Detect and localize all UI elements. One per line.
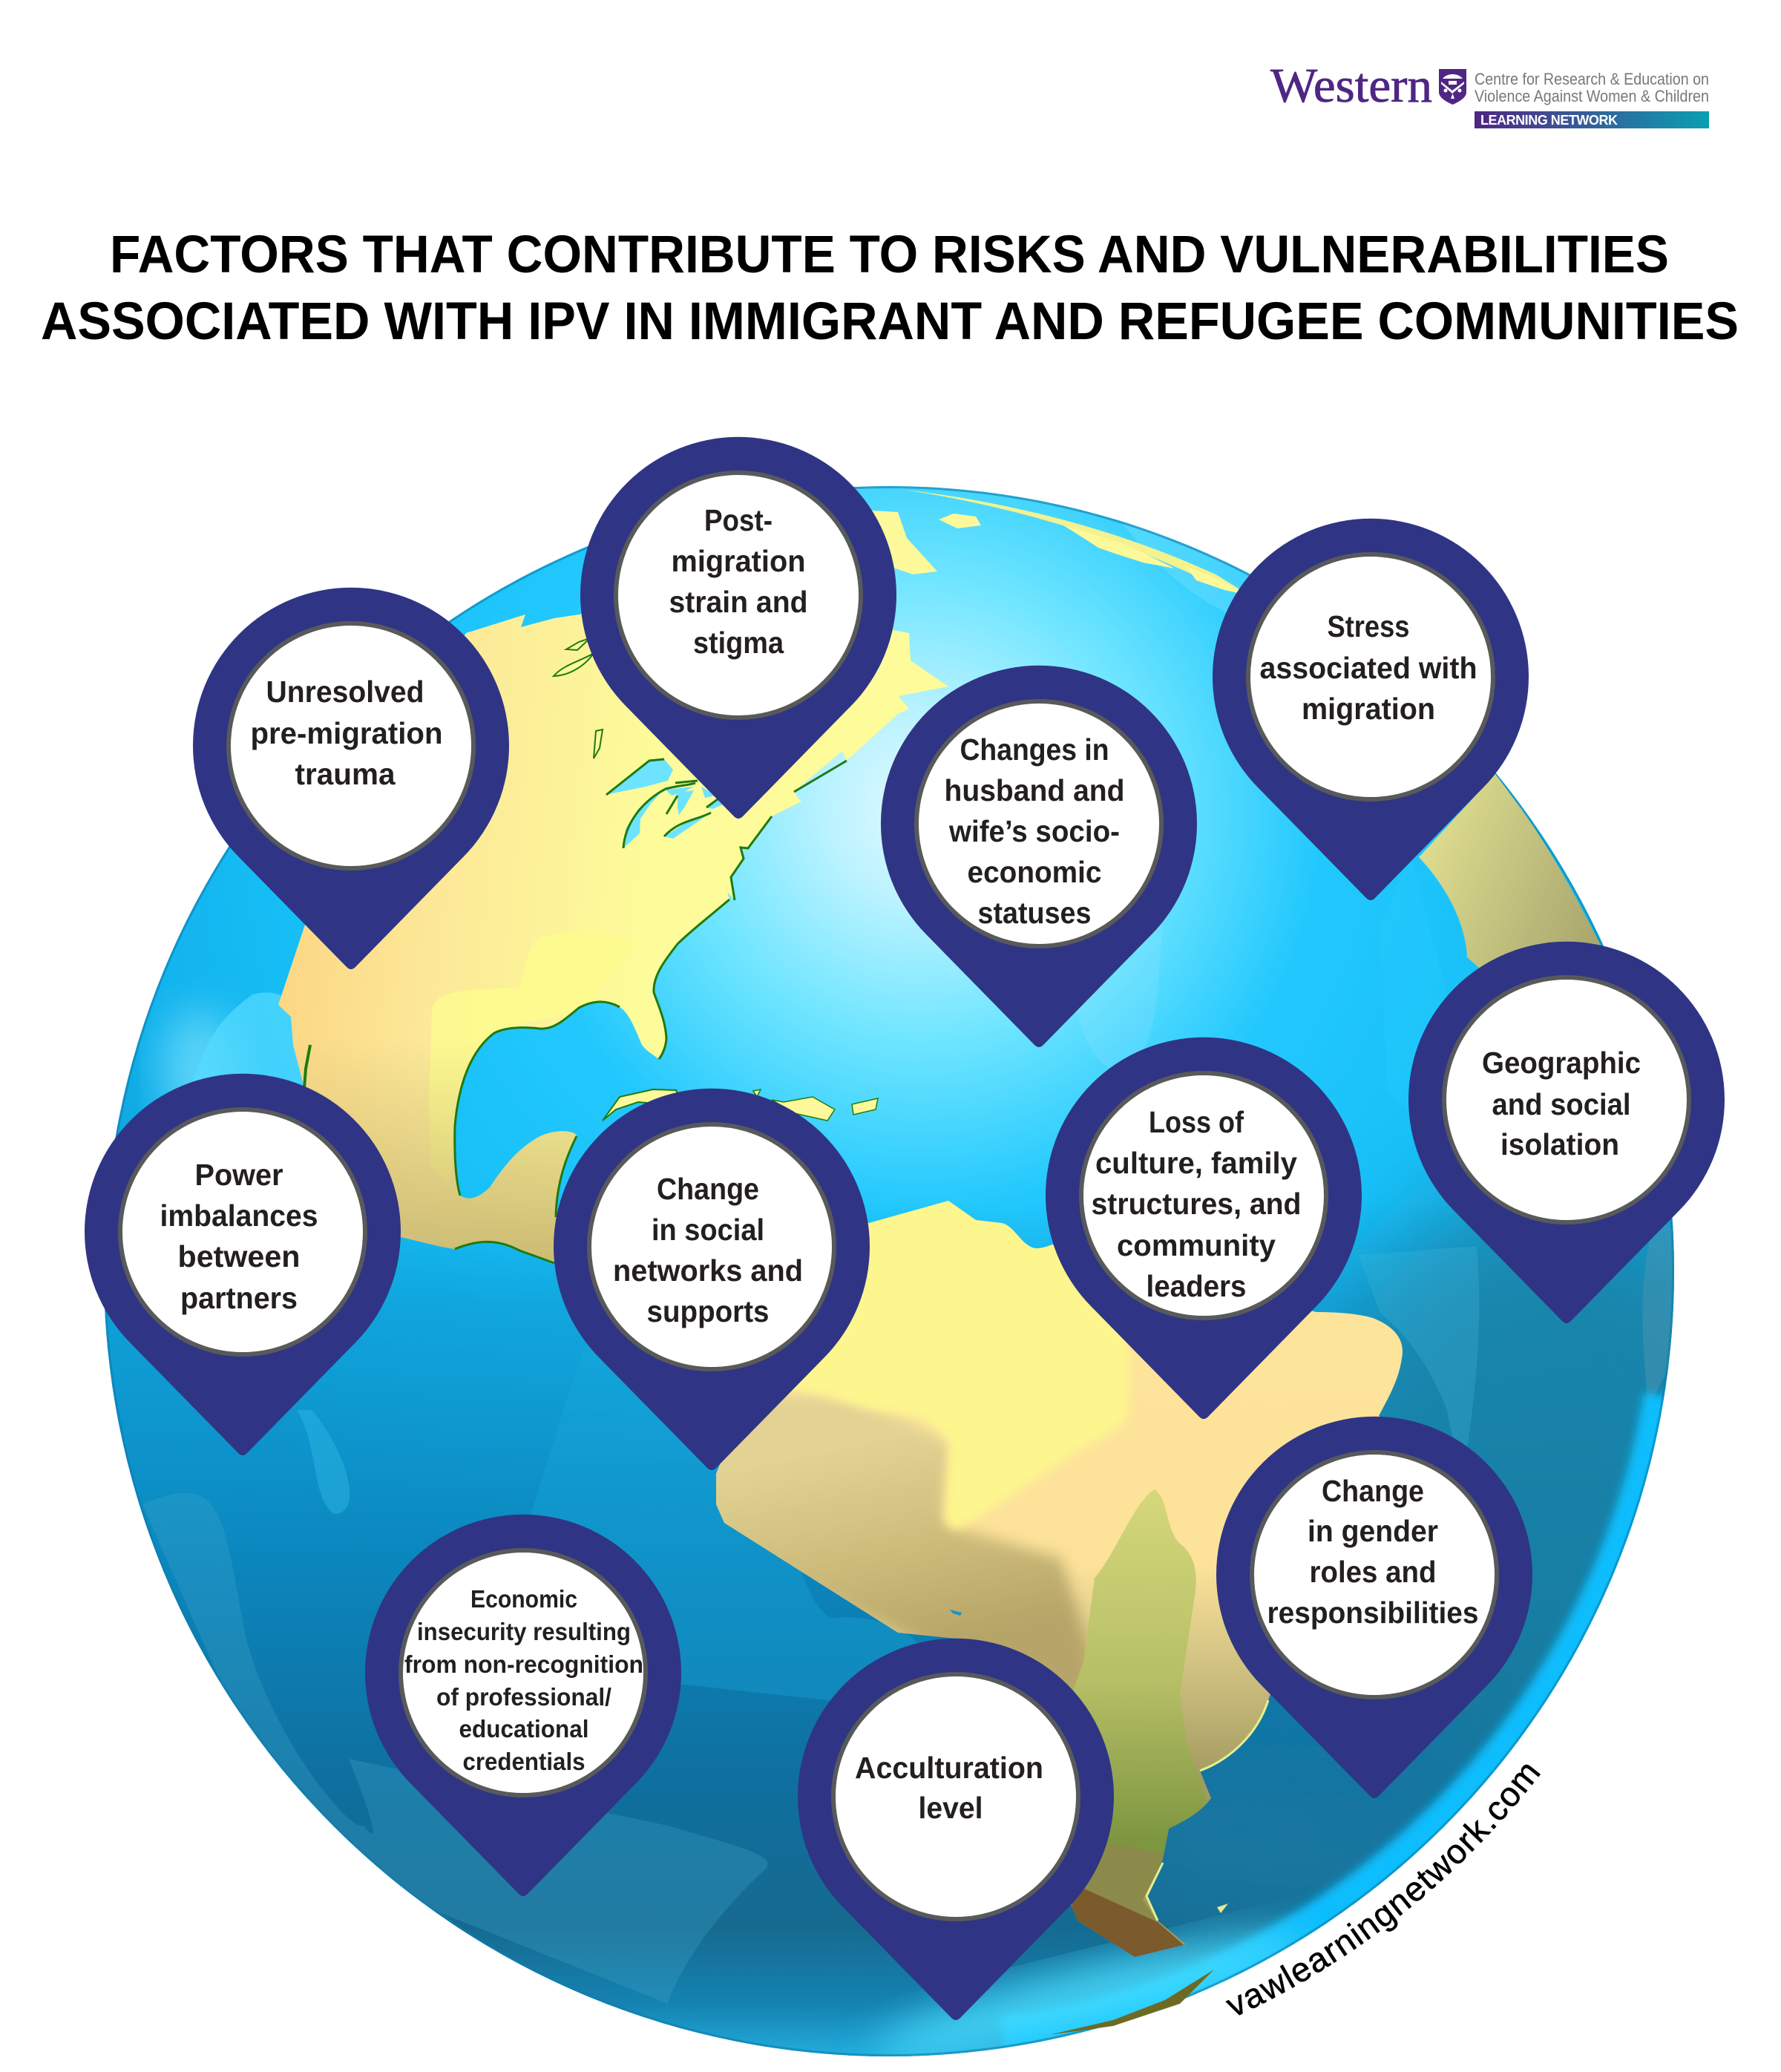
pin: Changes in husband and wife's socio-economic statuses: wife’s socio- [948, 814, 1120, 848]
pin: Change in gender roles and responsibilities: Change [1322, 1474, 1424, 1508]
Baja sliver [304, 1045, 310, 1088]
pin: Changes in husband and wife's socio-economic statuses: economic [968, 855, 1101, 889]
pin: Geographic and social isolation: Geographic [1482, 1046, 1641, 1080]
logo: Violence Against Women & Children [1475, 87, 1709, 105]
right side teal shading [1313, 1170, 1674, 1786]
pin: Changes in husband and wife's socio-economic statuses: Changes in [960, 732, 1109, 767]
pin: Changes in husband and wife's socio-economic statuses: statuses [978, 896, 1091, 930]
pin: Stress associated with migration [1213, 519, 1529, 900]
globe [96, 486, 1766, 2072]
logo: LEARNING NETWORK [1480, 113, 1618, 128]
ocean base [104, 486, 1674, 2056]
ocean soft current shapes [1077, 922, 1163, 1069]
lakes [606, 759, 673, 795]
pin: Change in gender roles and responsibilities [1216, 1417, 1532, 1798]
logo [1270, 59, 1709, 128]
pin: Loss of culture, family structures, and community leaders: community [1117, 1228, 1276, 1262]
pin: Economic insecurity: insecurity resulting [417, 1618, 631, 1645]
Caribbean islands [603, 1089, 683, 1121]
pin: Geographic and social isolation: and social [1492, 1087, 1631, 1121]
pin: Geographic and social isolation [1408, 942, 1725, 1323]
pin: Loss of culture, family structures, and community leaders: Loss of [1149, 1105, 1244, 1139]
title: ASSOCIATED WITH IPV IN IMMIGRANT AND REFUGEE COMMUNITIES [41, 292, 1739, 351]
pin: Economic insecurity: credentials [463, 1748, 585, 1775]
title [41, 226, 1739, 351]
pin: Unresolved pre-migration trauma: Unresolved [266, 675, 424, 709]
pin: Change in gender roles and responsibilities: roles and [1309, 1555, 1437, 1589]
pin: Loss of culture, family structures, and community leaders: culture, family [1095, 1146, 1297, 1180]
shaded left edge [104, 486, 1674, 2056]
left light glow [162, 1009, 236, 1128]
pin: Post-migration strain and stigma: strain and [669, 585, 807, 619]
arctic islands [554, 638, 603, 758]
pin: Economic insecurity: Economic [470, 1585, 577, 1613]
pin: Acculturation level [798, 1639, 1114, 2020]
pin: Changes in husband and wife's socio-economic statuses: husband and [944, 773, 1125, 807]
pin: Acculturation level: level [919, 1791, 983, 1825]
pin: Change in gender roles and responsibilities: responsibilities [1267, 1596, 1478, 1630]
ocean lower shading [96, 1202, 1685, 2063]
land: South America [716, 1201, 1403, 1957]
learning network bar [1475, 111, 1709, 128]
website url: vawlearningnetwork.com [1225, 1765, 1541, 2016]
pin: Unresolved pre-migration trauma [193, 588, 509, 969]
pin: Changes in husband and wife's socio-economic statuses [881, 666, 1197, 1047]
pin: Power imbalances between partners: imbalances [160, 1199, 318, 1233]
pin: Loss of culture, family structures, and community leaders: structures, and [1091, 1187, 1302, 1221]
pin: Power imbalances between partners: partners [180, 1281, 298, 1315]
shield [1439, 69, 1466, 105]
Western wordmark: Western [1270, 59, 1432, 113]
pin: Post-migration strain and stigma: stigma [693, 626, 784, 660]
land: North America [267, 490, 1248, 1291]
pin: Post-migration strain and stigma: migration [671, 544, 806, 578]
land: Antarctic sliver [1049, 1970, 1214, 2035]
pin: Geographic and social isolation: isolation [1500, 1127, 1619, 1161]
centre name: Centre for Research & Education on [1475, 70, 1709, 88]
pin: Stress associated with migration: Stress [1327, 609, 1410, 643]
pin: Economic insecurity: of professional/ [436, 1683, 611, 1711]
pin: Economic insecurity: educational [459, 1715, 589, 1742]
pin: Loss of culture, family structures, and community leaders: leaders [1146, 1269, 1247, 1303]
pin: Economic insecurity [365, 1515, 681, 1896]
pin: Post-migration strain and stigma [580, 437, 896, 819]
pin: Post-migration strain and stigma: Post- [704, 503, 773, 537]
land: Africa edge [1419, 774, 1607, 972]
pin: Power imbalances between partners: Power [194, 1158, 283, 1192]
pin: Unresolved pre-migration trauma: pre-migration [251, 716, 442, 750]
pin: Power imbalances between partners [85, 1074, 401, 1455]
pin: Change in social networks and supports: in social [652, 1213, 764, 1247]
pin: Stress associated with migration: associated with [1260, 651, 1477, 685]
pin: Loss of culture, family structures, and community leaders [1046, 1037, 1362, 1419]
pin: Change in social networks and supports: Change [657, 1172, 759, 1206]
pin: Power imbalances between partners: between [178, 1239, 300, 1273]
pin: Change in social networks and supports: networks and [613, 1253, 803, 1288]
pin: Unresolved pre-migration trauma: trauma [295, 757, 396, 791]
pin: Acculturation level: Acculturation [855, 1751, 1043, 1785]
bright rim crescent [1002, 1395, 1661, 2033]
pin: Change in gender roles and responsibilities: in gender [1308, 1514, 1438, 1548]
pin: Economic insecurity: from non-recognition [404, 1650, 643, 1678]
pin: Change in social networks and supports: supports [647, 1294, 769, 1328]
pin: Change in social networks and supports [554, 1089, 870, 1470]
title: FACTORS THAT CONTRIBUTE TO RISKS AND VULNERABILITIES [110, 226, 1669, 284]
pin: Stress associated with migration: migration [1302, 692, 1435, 726]
